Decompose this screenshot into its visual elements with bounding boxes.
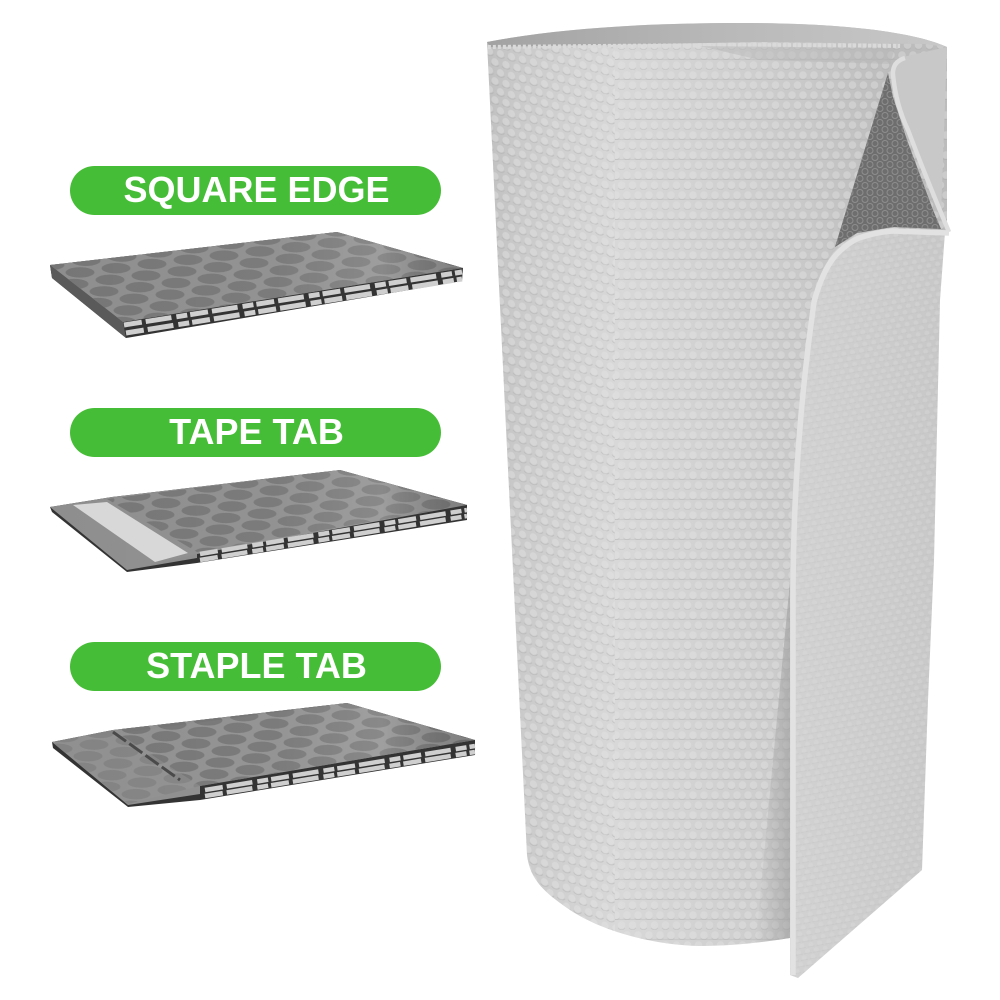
panel: tape tab sheet xyxy=(50,470,467,572)
rim ridge xyxy=(488,45,900,47)
flap white edge xyxy=(793,231,949,975)
roll of bubble insulation xyxy=(480,20,955,978)
label: staple tab xyxy=(70,642,441,691)
label: staple tab: STAPLE TAB xyxy=(146,645,367,686)
label: tape tab: TAPE TAB xyxy=(169,411,344,452)
staple seam xyxy=(113,732,180,780)
label: square edge: SQUARE EDGE xyxy=(123,169,390,210)
panel: staple tab sheet xyxy=(52,703,475,807)
roll body xyxy=(480,20,955,950)
folded flap edge xyxy=(893,58,949,232)
white tape strip xyxy=(73,502,188,562)
label: square edge xyxy=(70,166,441,215)
front hanging flap xyxy=(790,228,945,978)
label: tape tab xyxy=(70,408,441,457)
panel: square edge sheet xyxy=(50,232,463,338)
top rim of roll xyxy=(487,23,947,47)
band under rim xyxy=(700,46,895,64)
flap inner dark face xyxy=(835,73,941,247)
folded back flap xyxy=(892,47,950,232)
